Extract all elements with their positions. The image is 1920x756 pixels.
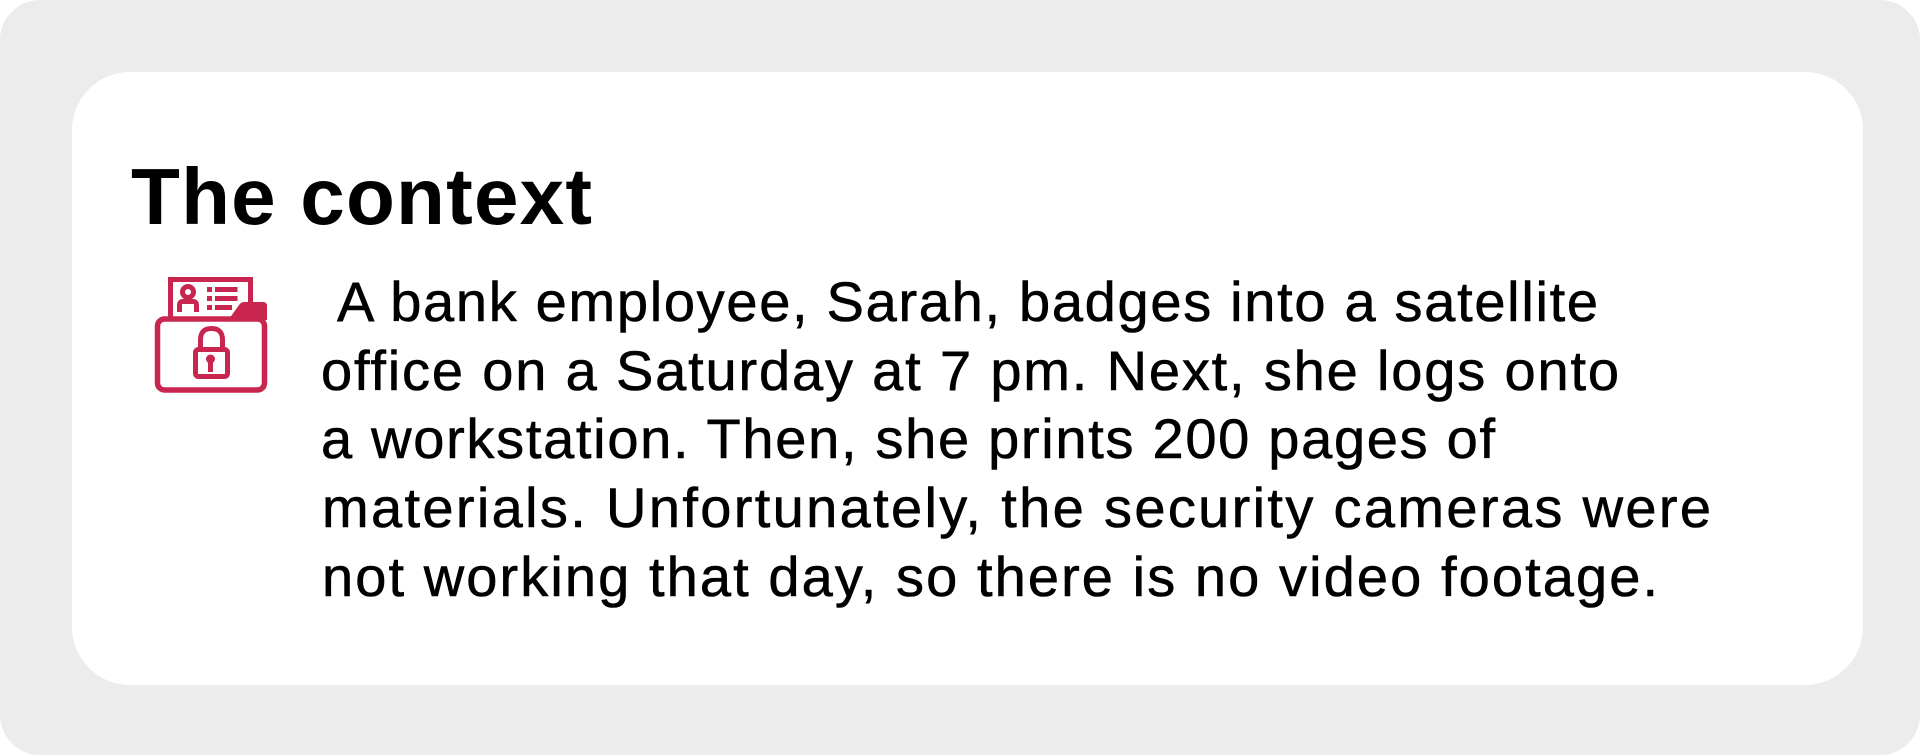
- icon: locked folder with ID card: [158, 280, 267, 390]
- line 4: materials. Unfortunately, the security cameras were: [322, 476, 1711, 539]
- heading: The context: [131, 152, 592, 241]
- line 5: not working that day, so there is no video footage.: [322, 545, 1658, 608]
- line 2: office on a Saturday at 7 pm. Next, she logs onto: [321, 339, 1619, 402]
- line 3: a workstation. Then, she prints 200 pages of: [321, 407, 1495, 470]
- inner white card: [72, 72, 1863, 685]
- line 1: A bank employee, Sarah, badges into a satellite: [337, 270, 1598, 333]
- body text: [321, 270, 1711, 608]
